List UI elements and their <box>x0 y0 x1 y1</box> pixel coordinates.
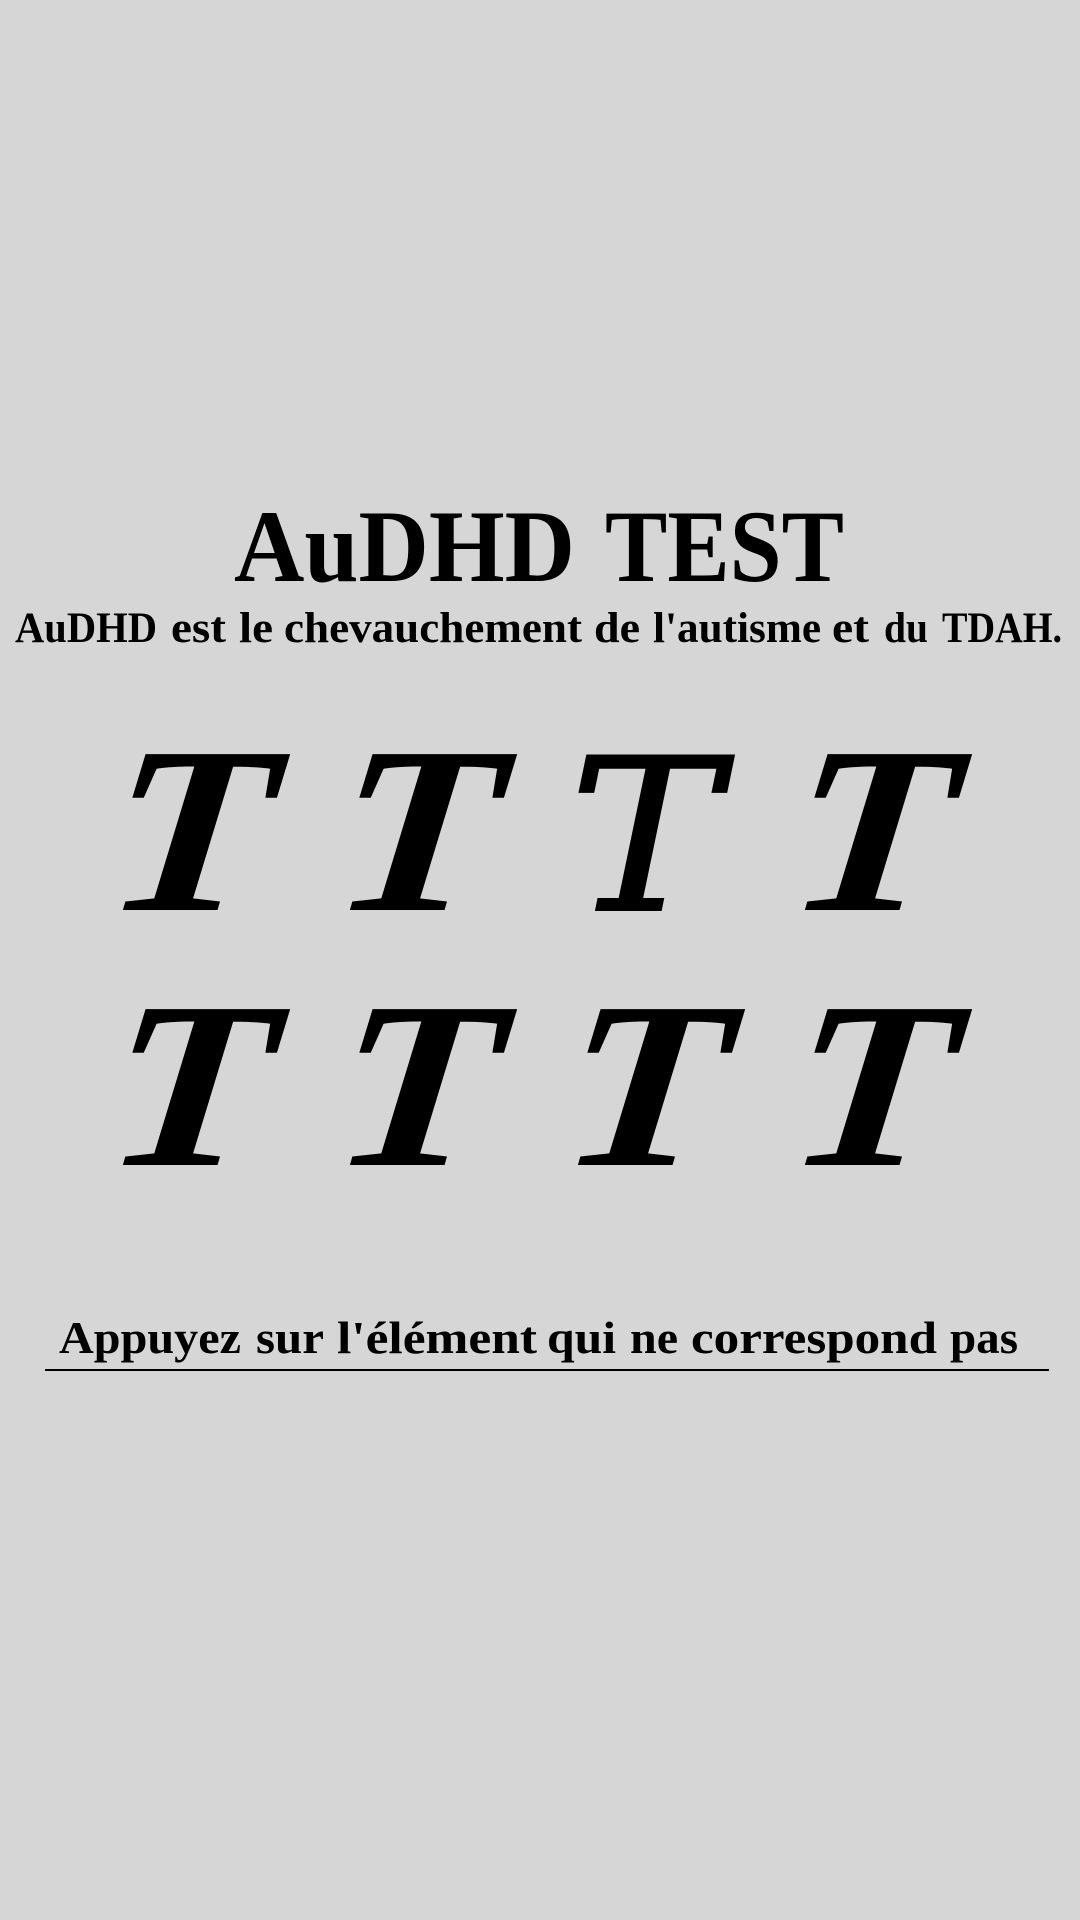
title: AuDHD <box>234 490 575 604</box>
subtitle: l'autisme <box>653 605 821 652</box>
instruction underline <box>45 1369 1049 1371</box>
subtitle <box>15 605 1062 652</box>
instruction text: Appuyez <box>59 1312 241 1363</box>
grid of letters T <box>96 698 979 1217</box>
letter T row 1 column 4: T <box>778 698 979 962</box>
letter T row 2 column 2: T <box>323 953 524 1217</box>
title <box>234 490 844 604</box>
instruction text: l'élément <box>337 1312 538 1363</box>
subtitle: TDAH. <box>942 605 1062 652</box>
letter T row 2 column 3: T <box>551 953 752 1217</box>
instruction text: qui <box>547 1312 616 1363</box>
subtitle: de <box>594 605 640 652</box>
subtitle: chevauchement <box>284 605 583 652</box>
subtitle: et <box>832 605 870 652</box>
subtitle: le <box>239 605 273 652</box>
letter T row 2 column 1: T <box>96 953 297 1217</box>
title: TEST <box>605 490 844 604</box>
instruction text: sur <box>256 1312 324 1363</box>
odd letter T row 1 column 3: T <box>569 713 735 960</box>
instruction text <box>59 1312 1018 1363</box>
letter T row 1 column 2: T <box>323 698 524 962</box>
letter T row 1 column 1: T <box>96 698 297 962</box>
instruction text: correspond <box>691 1312 937 1363</box>
instruction text: ne <box>630 1312 678 1363</box>
subtitle: AuDHD <box>15 605 157 652</box>
instruction text: pas <box>950 1312 1018 1363</box>
letter T row 2 column 4: T <box>778 953 979 1217</box>
subtitle: du <box>884 605 928 652</box>
subtitle: est <box>171 605 227 652</box>
